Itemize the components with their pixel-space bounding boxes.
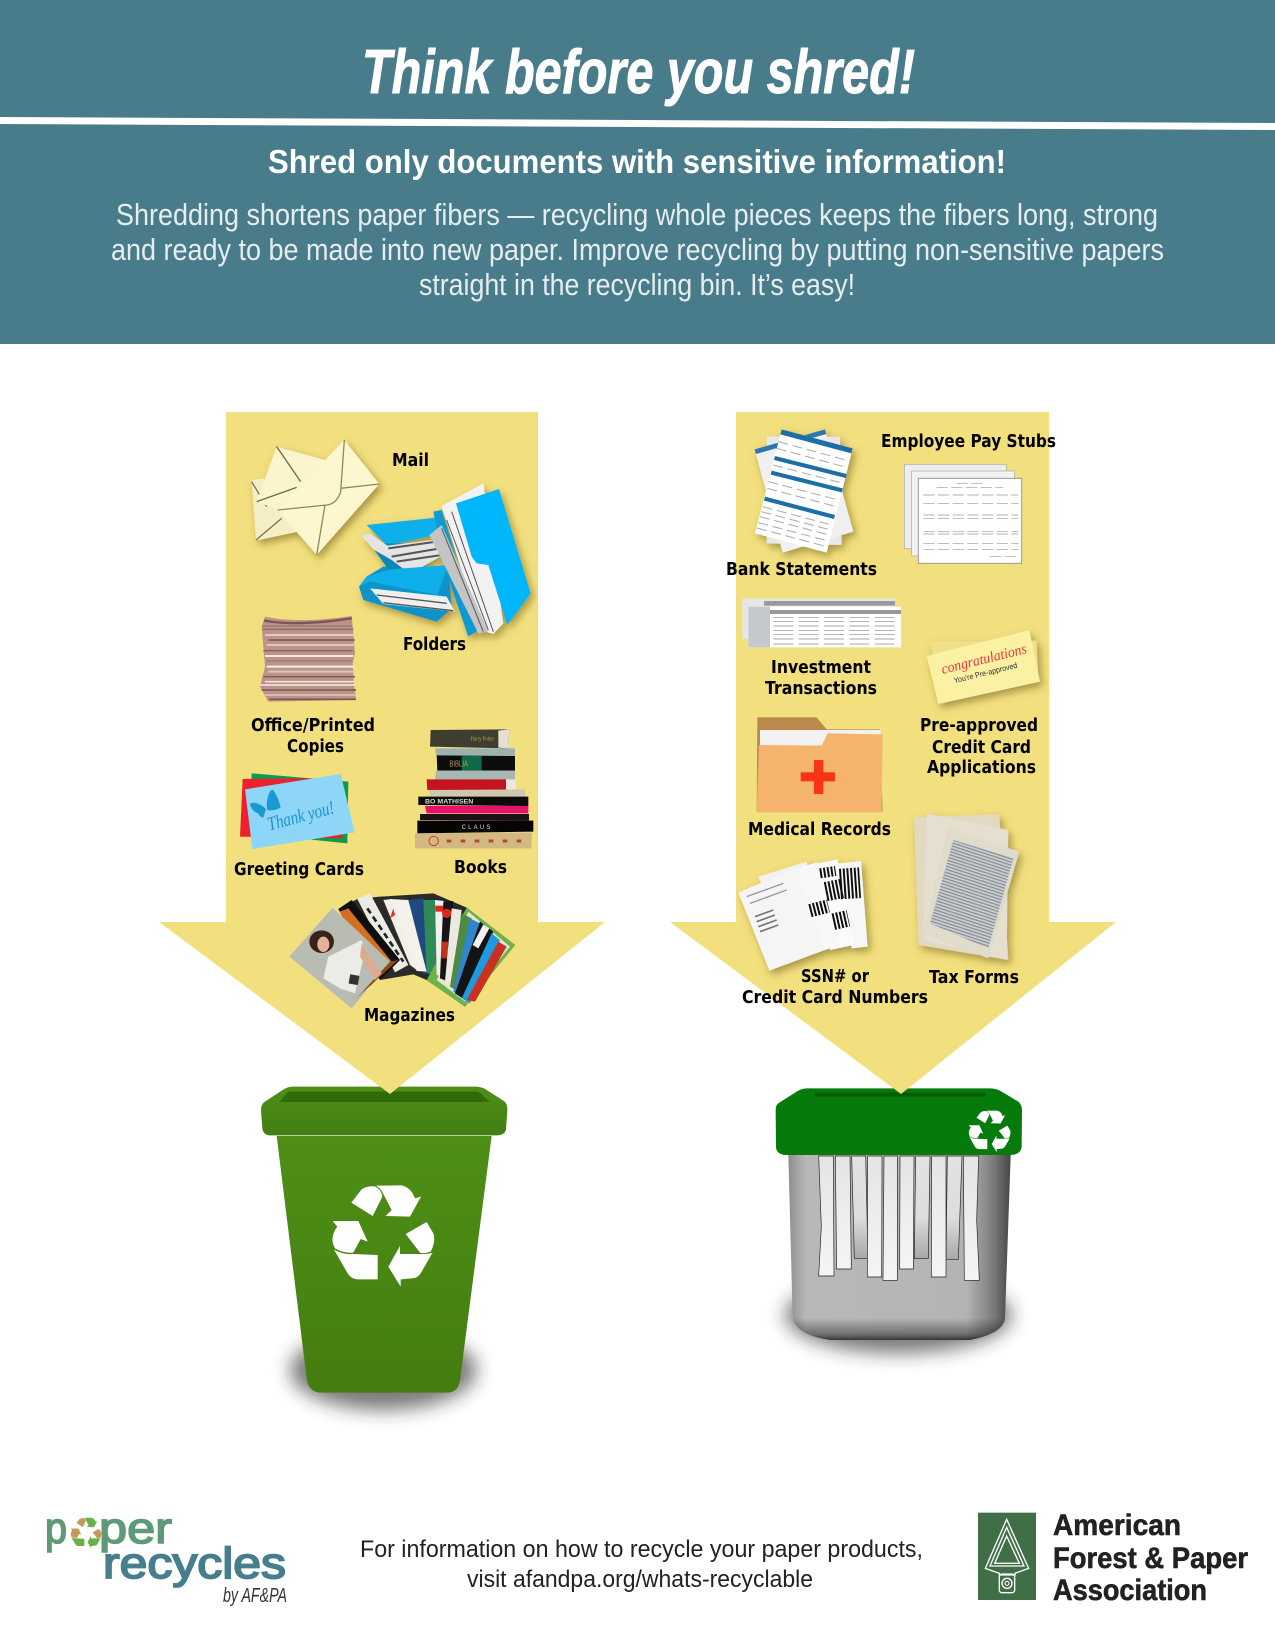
icon: mail envelopes	[252, 440, 379, 555]
footer text	[360, 1536, 923, 1593]
logo: American Forest & Paper Association: American	[1053, 1509, 1181, 1542]
icon: pay stubs	[904, 464, 1022, 563]
arrow shape: recycle	[159, 412, 605, 1094]
icon: magazines	[289, 893, 515, 1008]
logo: paper recycles: by AF&PA	[223, 1585, 287, 1607]
icon: investment transactions	[742, 598, 901, 647]
label: Folders: Folders	[403, 634, 466, 655]
icon: greeting cards	[240, 773, 355, 849]
icon: small recycling symbol	[969, 1111, 1010, 1152]
logo: American Forest & Paper Association	[978, 1509, 1248, 1607]
icon: logo recycling symbol	[71, 1518, 101, 1548]
arrow shape: shred	[670, 412, 1116, 1094]
recycling arrow tip over bin	[358, 1070, 420, 1094]
logo: American Forest & Paper Association: Association	[1053, 1574, 1207, 1607]
intro paragraph: straight in the recycling bin. It’s easy!	[419, 268, 855, 302]
label: Magazines: Magazines	[364, 1005, 455, 1026]
label: SSN# or Credit Card Numbers: SSN# or	[801, 966, 869, 987]
intro paragraph: Shredding shortens paper fibers — recycling whole pieces keeps the fibers long, strong	[116, 198, 1158, 232]
label: Bank Statements: Bank Statements	[726, 559, 877, 580]
footer text: visit afandpa.org/whats-recyclable	[467, 1566, 813, 1593]
icon: SSN and credit card documents	[738, 859, 868, 971]
lid slot	[815, 1093, 986, 1097]
label: Pre-approved Credit Card Applications: Credit Card	[932, 737, 1031, 758]
intro paragraph: and ready to be made into new paper. Improve recycling by putting non-sensitive papers	[111, 233, 1164, 267]
icon: books: CLAUS	[462, 825, 490, 831]
label: Pre-approved Credit Card Applications: Applications	[927, 757, 1036, 778]
icon: tree mark	[978, 1513, 1036, 1600]
title: Think before you shred!	[362, 38, 915, 107]
bin shadow	[290, 1330, 477, 1410]
icon: medical records folder	[757, 717, 883, 812]
logo: paper recycles: recycles	[103, 1539, 286, 1588]
logo: paper recycles: p	[45, 1504, 67, 1553]
label: Mail: Mail	[392, 450, 429, 471]
shredder shadow	[785, 1277, 1012, 1353]
panel: shred arrow	[670, 412, 1116, 1094]
icon: recycling symbol	[332, 1185, 434, 1287]
label: Greeting Cards: Greeting Cards	[234, 859, 364, 880]
shredder body	[788, 1155, 1011, 1340]
shred arrow tip over lid	[869, 1070, 931, 1094]
label: Office/Printed Copies: Office/Printed	[251, 715, 375, 736]
icon: books	[415, 729, 533, 848]
logo: paper recycles: per	[99, 1504, 172, 1553]
footer text: For information on how to recycle your paper products,	[360, 1536, 923, 1563]
bin opening	[279, 1092, 490, 1102]
intro paragraph	[111, 198, 1164, 302]
shredder lid	[776, 1088, 1022, 1155]
icon: folders	[359, 483, 531, 637]
bin rim	[261, 1087, 507, 1135]
logo: paper recycles	[45, 1504, 287, 1607]
label: Office/Printed Copies: Copies	[287, 736, 344, 757]
label: Investment Transactions: Transactions	[765, 678, 877, 699]
label: SSN# or Credit Card Numbers: Credit Card Numbers	[742, 987, 928, 1008]
label: Employee Pay Stubs: Employee Pay Stubs	[881, 431, 1056, 452]
icon: tax forms	[914, 813, 1019, 960]
icon: books: BO MATHISEN	[425, 799, 474, 806]
header band	[0, 0, 1275, 344]
icon: pre-approved credit card offer	[927, 630, 1040, 704]
icon: pre-approved credit card offer: congratulations	[940, 641, 1029, 678]
icon: books: Harry Potter	[471, 736, 495, 743]
label: Office/Printed Copies	[251, 715, 375, 757]
label: SSN# or Credit Card Numbers	[742, 966, 928, 1008]
icon: greeting cards: Thank you!	[265, 798, 337, 835]
icon: paper stack	[260, 616, 356, 702]
label: Medical Records: Medical Records	[748, 819, 891, 840]
icon: books: BIBLIA	[449, 760, 468, 769]
label: Tax Forms: Tax Forms	[929, 967, 1019, 988]
panel: recycle arrow	[159, 412, 605, 1094]
label: Investment Transactions: Investment	[771, 657, 871, 678]
logo: American Forest & Paper Association: Forest & Paper	[1053, 1542, 1248, 1575]
label: Pre-approved Credit Card Applications	[920, 715, 1038, 778]
recycling bin	[261, 1087, 507, 1410]
shredder	[776, 1088, 1022, 1353]
label: Pre-approved Credit Card Applications: Pre-approved	[920, 715, 1038, 736]
paper strips	[819, 1156, 979, 1280]
icon: bank statements	[755, 429, 853, 553]
subtitle: Shred only documents with sensitive information!	[268, 143, 1006, 180]
label: Books: Books	[454, 857, 507, 878]
bin body	[277, 1136, 492, 1393]
icon: pre-approved credit card offer: You're Pre-approved	[953, 661, 1018, 685]
label: Investment Transactions	[765, 657, 877, 699]
